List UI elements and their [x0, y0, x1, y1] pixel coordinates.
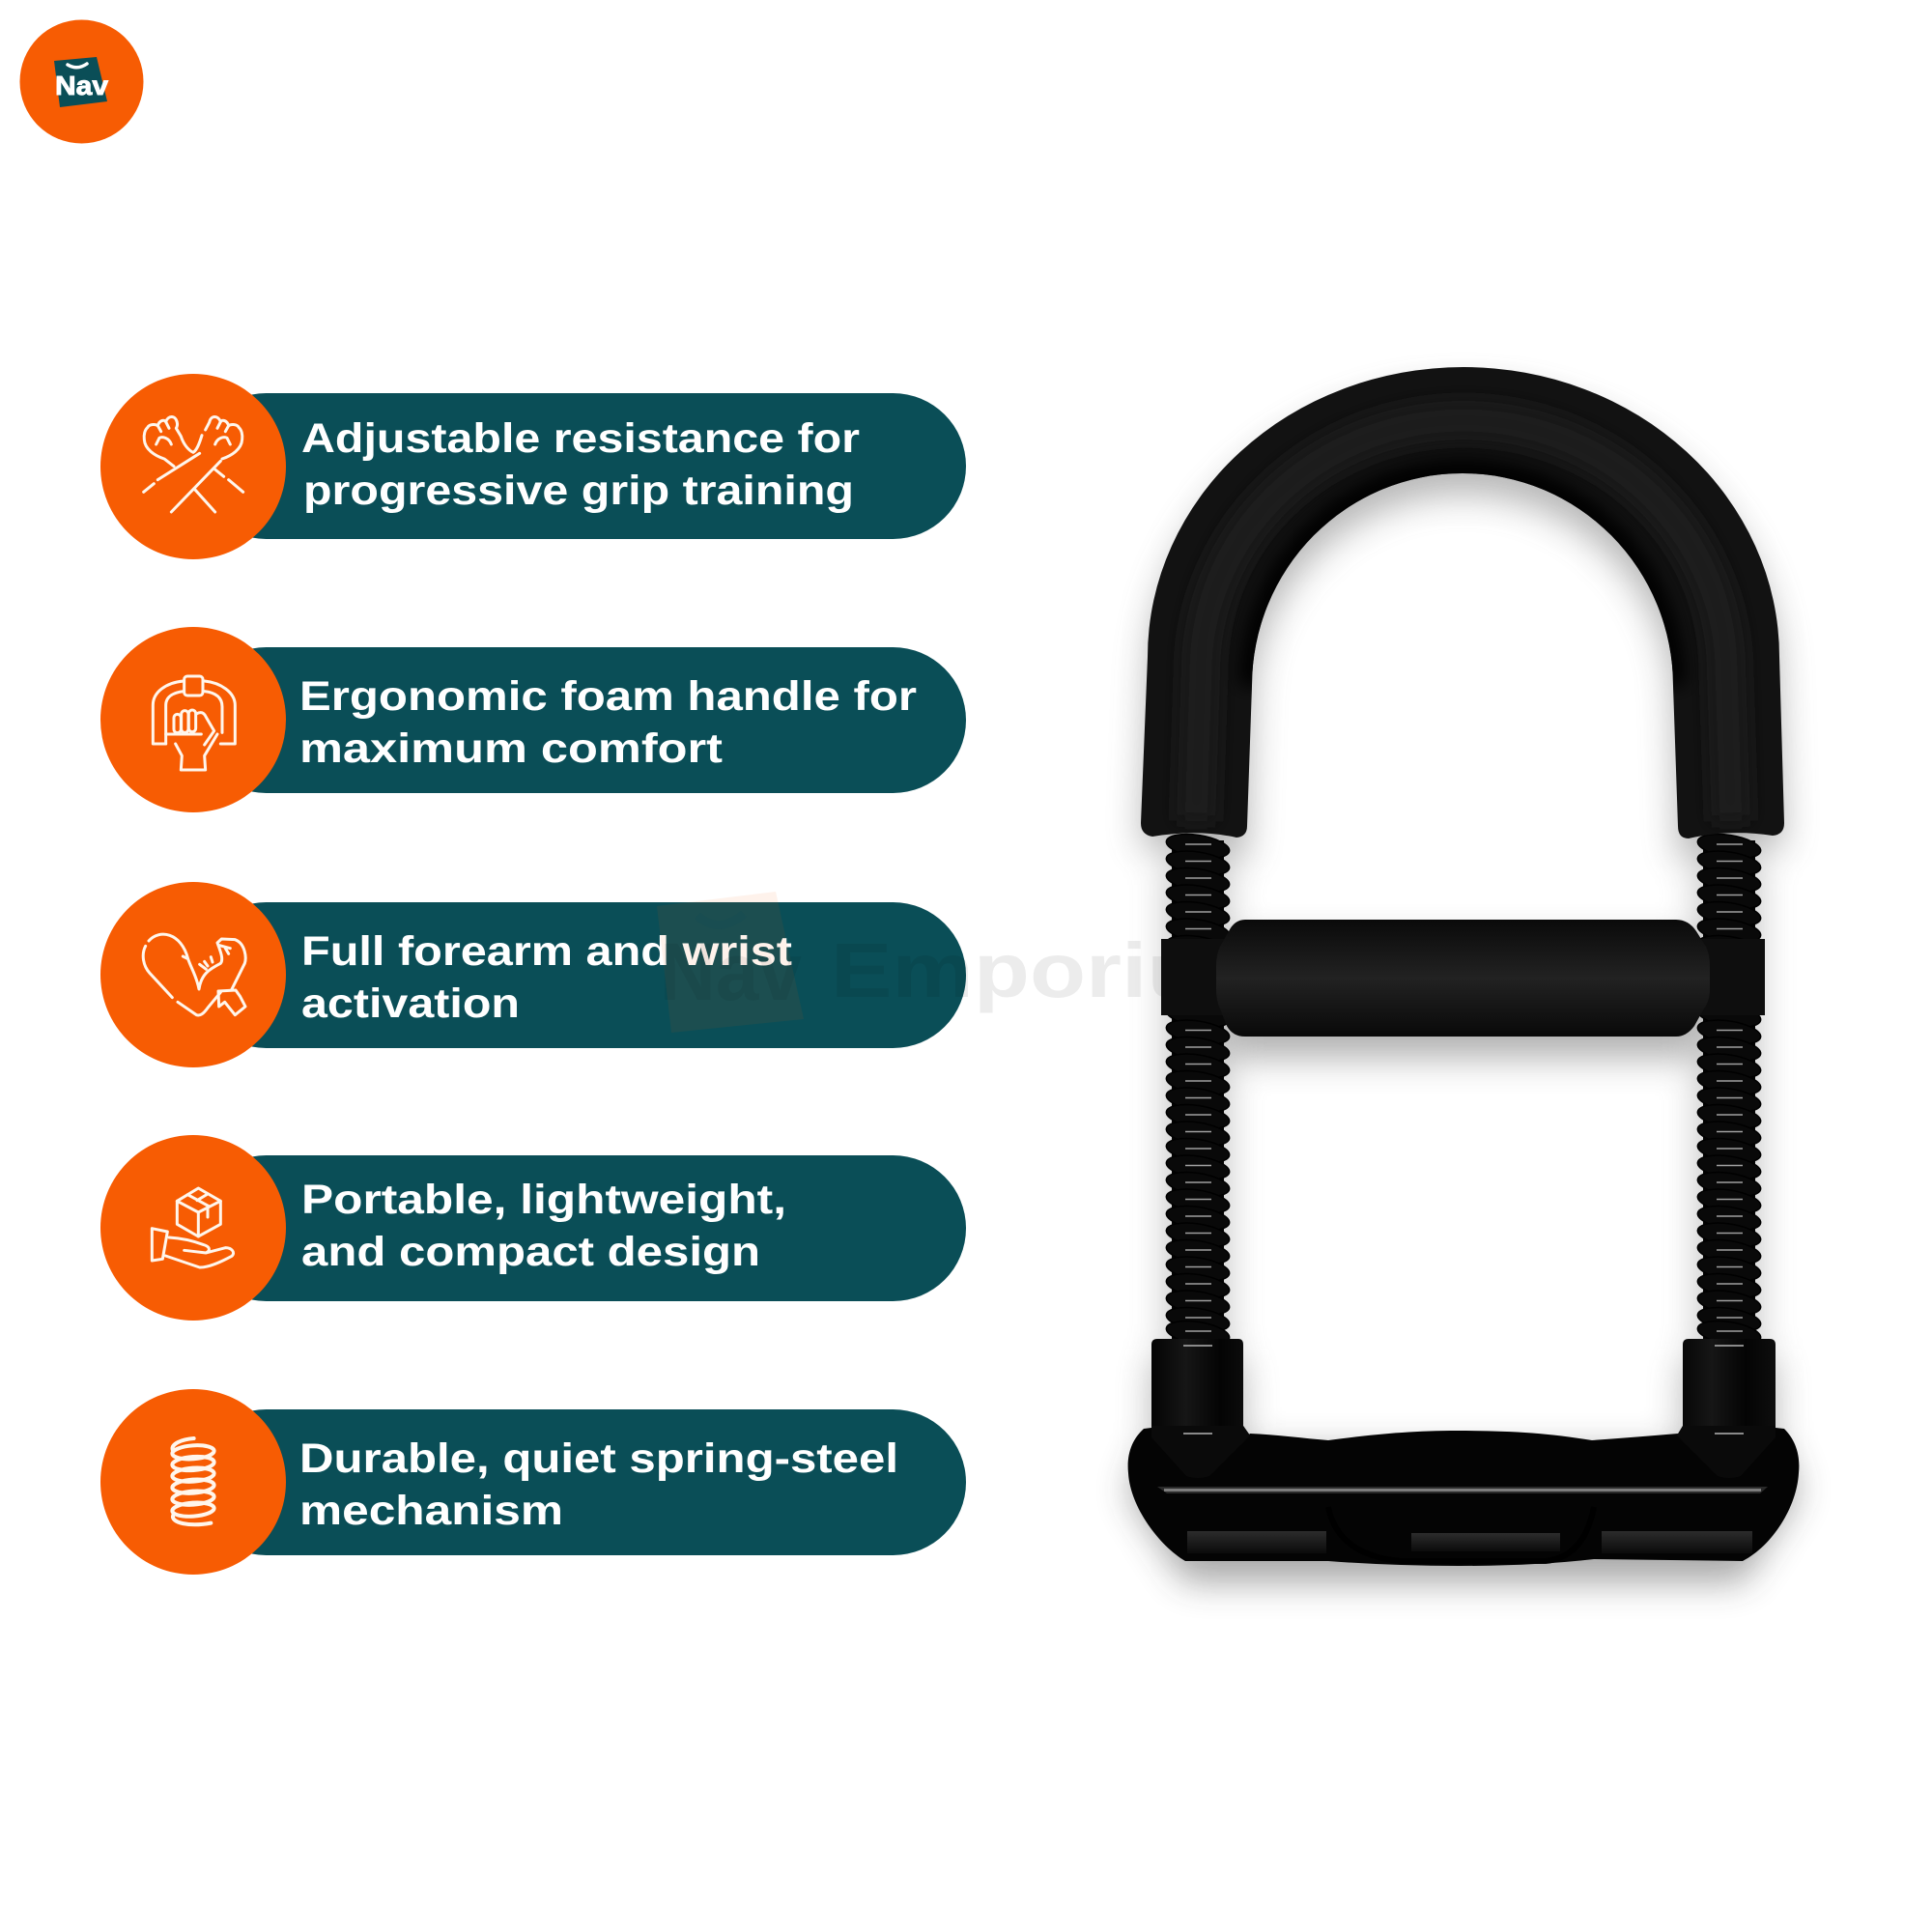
icon circle 5: coil spring — [100, 1389, 286, 1575]
icon circle 3: flexed arm — [100, 882, 286, 1067]
text: forearm activation: Full forearm and wrist — [301, 928, 792, 975]
text: adjustable resistance: progressive grip training — [303, 468, 854, 514]
feature pill 1 background — [193, 393, 966, 539]
feature pill 4 background — [193, 1155, 966, 1301]
crossbar foam grip — [1216, 920, 1710, 1037]
product shadow — [1128, 388, 1799, 1582]
watermark: Emporium — [831, 927, 1285, 1013]
right strap — [1692, 939, 1765, 1015]
text: spring-steel mechanism: mechanism — [299, 1488, 563, 1534]
feature pill 2 background — [193, 647, 966, 793]
left collar — [1151, 1339, 1250, 1477]
watermark: Nav — [660, 926, 802, 1017]
text: adjustable resistance — [301, 415, 860, 514]
foam U-handle — [1141, 367, 1784, 838]
text: forearm activation — [301, 928, 792, 1027]
icon circle 2: hand gripping handle — [100, 627, 286, 812]
text: portable design — [301, 1177, 786, 1275]
text: ergonomic handle: Ergonomic foam handle for — [299, 673, 917, 720]
right collar — [1677, 1339, 1776, 1477]
text: spring-steel mechanism — [299, 1435, 898, 1534]
icon circle 1: crossed arms — [100, 374, 286, 559]
logo badge — [19, 19, 143, 143]
text: ergonomic handle: maximum comfort — [299, 725, 723, 772]
text: spring-steel mechanism: Durable, quiet spring-steel — [299, 1435, 898, 1482]
text: forearm activation: activation — [301, 980, 520, 1027]
left spring — [1165, 830, 1231, 1350]
text: portable design: Portable, lightweight, — [301, 1177, 786, 1223]
text: portable design: and compact design — [301, 1229, 760, 1275]
product: hand grip trainer — [1128, 367, 1799, 1582]
right spring — [1696, 830, 1762, 1350]
feature pill 3 background — [193, 902, 966, 1048]
logo badge: Nav — [55, 71, 108, 100]
icon circle 4: box on hand — [100, 1135, 286, 1321]
watermark — [657, 892, 1285, 1033]
left strap — [1161, 939, 1235, 1015]
feature pill 5 background — [193, 1409, 966, 1555]
base handle — [1128, 1346, 1799, 1566]
text: ergonomic handle — [299, 673, 917, 772]
text: adjustable resistance: Adjustable resistance for — [301, 415, 860, 462]
